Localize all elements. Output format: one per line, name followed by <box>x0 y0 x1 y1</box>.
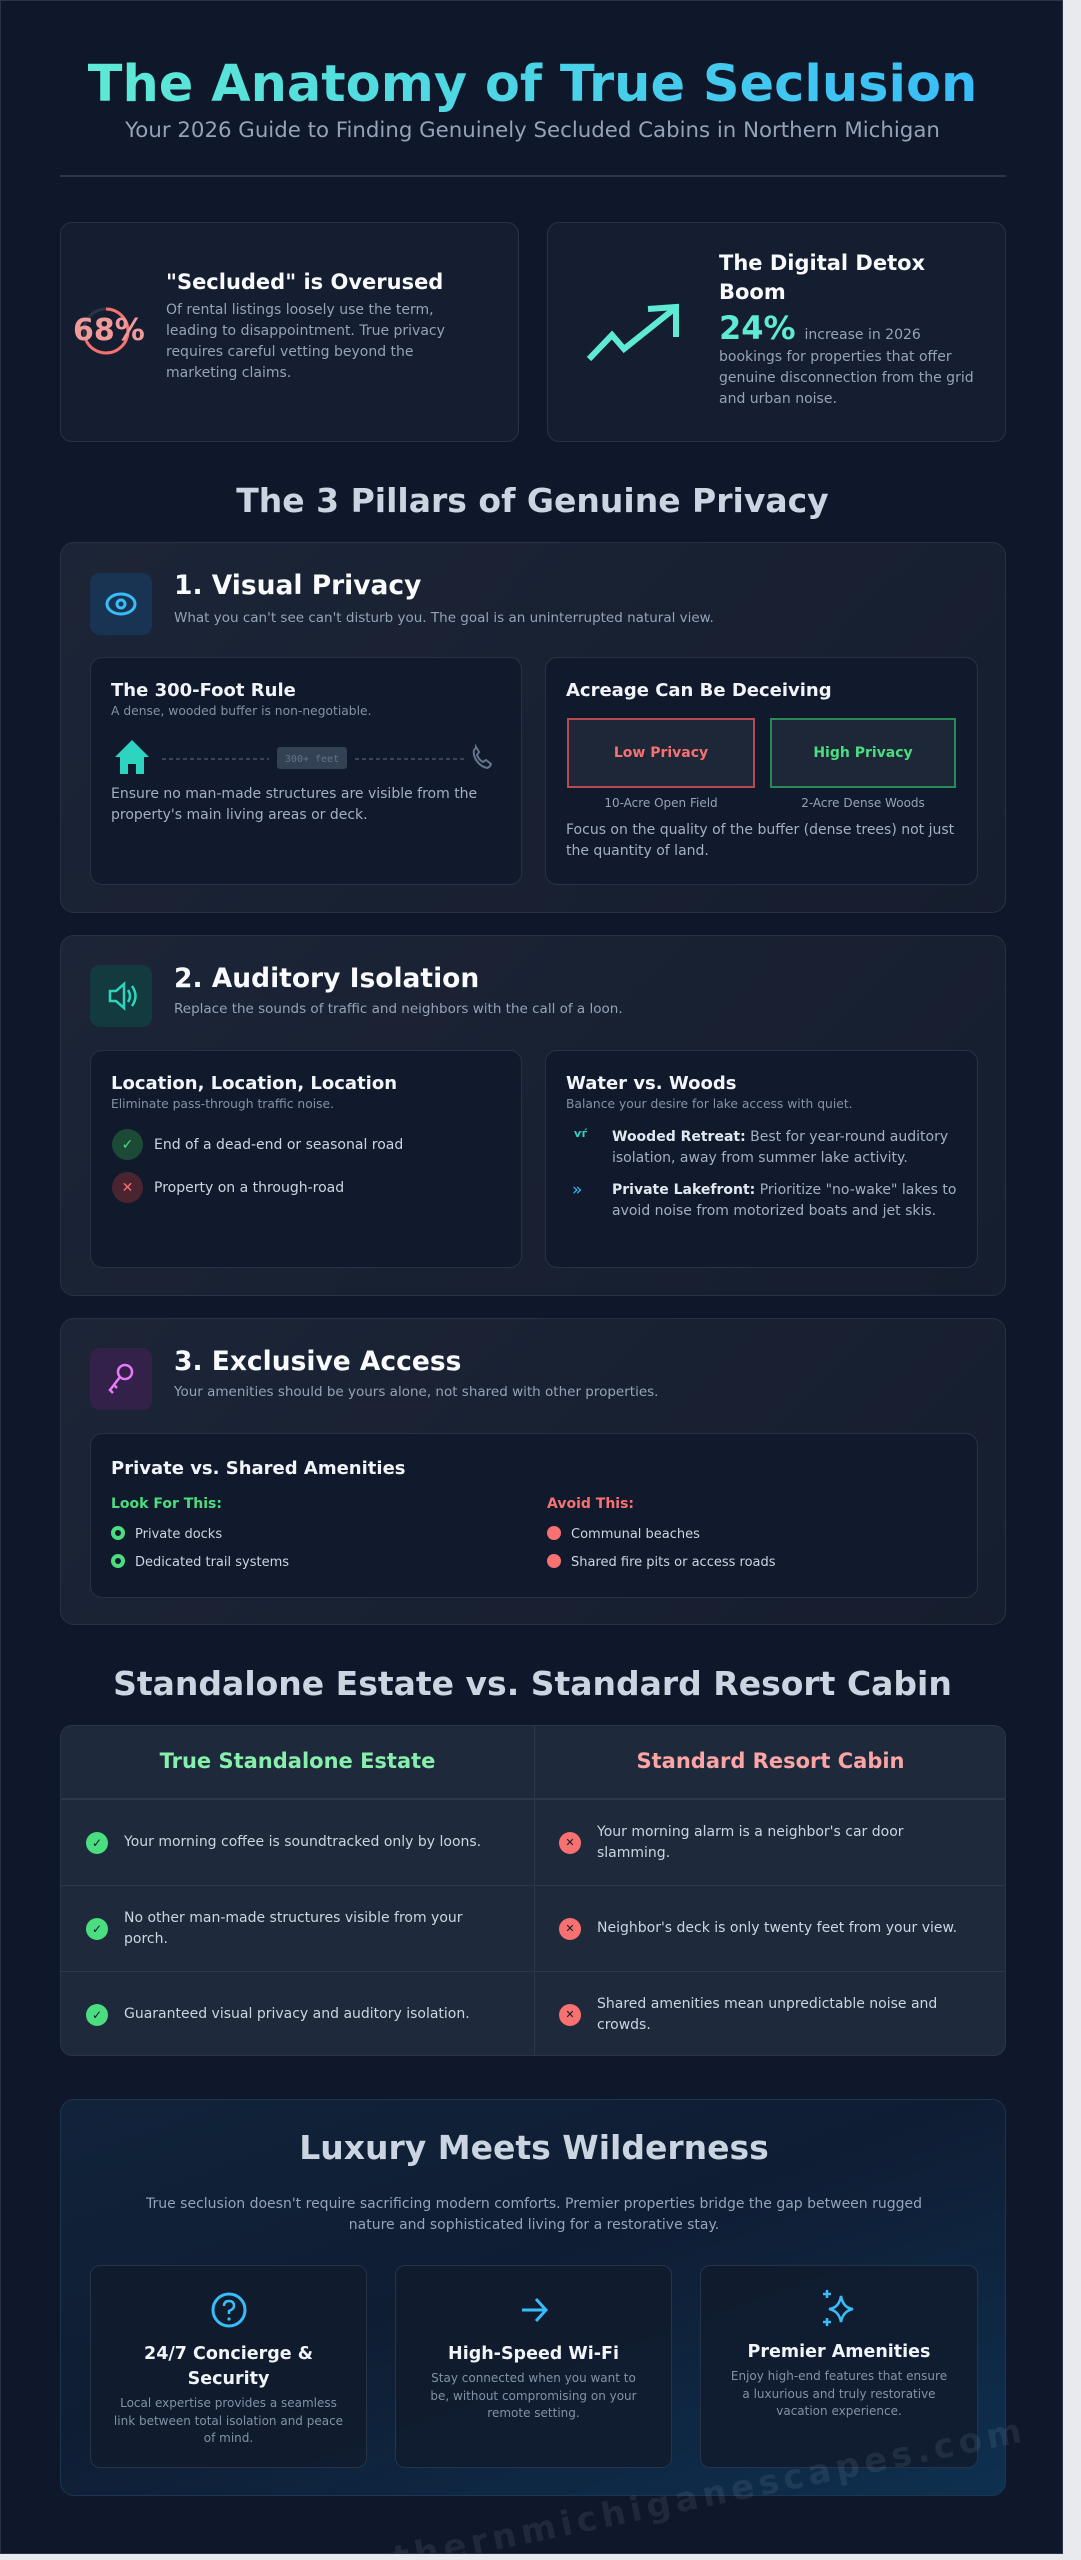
card: water vs woods: Water vs. Woods <box>566 1073 736 1094</box>
comparison table: ✕ <box>565 1836 575 1849</box>
item: bad <box>112 1172 344 1203</box>
icon: key <box>90 1348 152 1410</box>
comparison table: ✕ <box>565 1922 575 1935</box>
item: good: End of a dead-end or seasonal road <box>154 1136 403 1152</box>
header: resort: Standard Resort Cabin <box>636 1749 904 1773</box>
column: avoid this: Communal beaches <box>571 1527 700 1542</box>
box: high privacy <box>770 718 956 788</box>
card: concierge: 24/7 Concierge & Security <box>144 2344 313 2389</box>
card: 300-foot rule <box>90 657 522 885</box>
comparison table: ✓ <box>92 2008 102 2022</box>
diagram: house to neighbor distance <box>115 740 492 774</box>
title: The Anatomy of True Seclusion <box>88 55 977 114</box>
card: acreage: 10-Acre Open Field <box>604 796 718 810</box>
box: low privacy <box>567 718 755 788</box>
card: amenities <box>700 2265 978 2468</box>
comparison table: Neighbor's deck is only twenty feet from your view. <box>597 1920 957 1936</box>
icon: 68% ring: 68% <box>73 313 145 348</box>
rows: Your morning coffee is soundtracked only by loons. <box>124 1834 481 1850</box>
description: Your amenities should be yours alone, not shared with other properties. <box>174 1384 658 1400</box>
card: concierge: Local expertise provides a seamless link between total isolation and peace of mind. <box>114 2396 343 2445</box>
header: standalone: True Standalone Estate <box>160 1749 435 1773</box>
card: amenities: Premier Amenities <box>748 2342 930 2362</box>
item: good <box>112 1129 403 1160</box>
text: secluded: "Secluded" is Overused <box>166 270 443 294</box>
panel: luxury meets wilderness <box>60 2099 1006 2496</box>
card: 300-foot rule: The 300-Foot Rule <box>111 680 296 701</box>
text: detox <box>719 251 974 407</box>
description: True seclusion doesn't require sacrificing modern comforts. Premier properties bridge the gap between rugged nature and sophisticated living for a restorative stay. <box>146 2196 922 2233</box>
card: private vs shared <box>90 1433 978 1598</box>
description: Replace the sounds of traffic and neighbors with the call of a loon. <box>174 1001 623 1017</box>
box: low privacy: Low Privacy <box>614 745 708 761</box>
column: avoid this: Shared fire pits or access roads <box>571 1555 776 1570</box>
text: detox: The Digital Detox Boom <box>719 251 925 304</box>
comparison table: Shared amenities mean unpredictable noise and crowds. <box>597 1996 937 2032</box>
icon: trend arrow <box>586 304 679 362</box>
heading: 3. Exclusive Access <box>174 1346 461 1377</box>
comparison table: Guaranteed visual privacy and auditory isolation. <box>124 2006 470 2022</box>
card: acreage <box>545 657 978 885</box>
text: detox: 24% increase in 2026 bookings for properties that offer genuine disconnection from the grid and urban noise. <box>719 309 974 407</box>
box: high privacy: High Privacy <box>813 745 913 761</box>
card: acreage: 2-Acre Dense Woods <box>801 796 925 810</box>
item: private lakefront: Private Lakefront: Prioritize "no-wake" lakes to avoid noise from motorized boats and jet skis. <box>612 1182 956 1219</box>
text: Focus on the quality of the buffer (dense trees) not just the quantity of land. <box>566 822 954 859</box>
rows: ✓ <box>92 1836 102 1850</box>
card: wifi: High-Speed Wi-Fi <box>448 2344 619 2364</box>
icon: sound <box>90 965 152 1027</box>
heading: comparison: Standalone Estate vs. Standard Resort Cabin <box>113 1664 952 1703</box>
text: Ensure no man-made structures are visible from the property's main living areas or deck. <box>111 786 477 823</box>
card: water vs woods: Balance your desire for lake access with quiet. <box>566 1097 853 1111</box>
subtitle: Your 2026 Guide to Finding Genuinely Secluded Cabins in Northern Michigan <box>125 118 940 143</box>
column: avoid this <box>547 1496 776 1570</box>
comparison table: ✓ <box>92 1922 102 1936</box>
heading: 2. Auditory Isolation <box>174 963 479 994</box>
comparison table <box>60 1725 1006 2056</box>
stat card: digital detox <box>547 222 1006 442</box>
column: avoid this: Avoid This: <box>547 1496 634 1512</box>
panel: exclusive access <box>60 1318 1006 1625</box>
card: amenities: Enjoy high-end features that ensure a luxurious and truly restorative vacation experience. <box>731 2369 947 2418</box>
column: look for this: Dedicated trail systems <box>135 1555 289 1570</box>
item: good: ✓ <box>122 1136 133 1152</box>
card: acreage: Acreage Can Be Deceiving <box>566 680 832 701</box>
card: wifi <box>395 2265 672 2468</box>
card: location: Eliminate pass-through traffic noise. <box>111 1097 334 1111</box>
icon: eye <box>90 573 152 635</box>
item: wooded retreat: ѵѓ <box>574 1127 587 1140</box>
description: What you can't see can't disturb you. The goal is an uninterrupted natural view. <box>174 610 714 626</box>
panel: auditory isolation <box>60 935 1006 1296</box>
stat card: secluded overused <box>60 222 519 442</box>
card: 300-foot rule: A dense, wooded buffer is non-negotiable. <box>111 704 372 718</box>
heading: visual privacy: 1. Visual Privacy <box>174 570 421 601</box>
item: private lakefront: » <box>572 1180 582 1200</box>
item: bad: Property on a through-road <box>154 1180 344 1196</box>
comparison table: Your morning alarm is a neighbor's car door slamming. <box>597 1824 904 1860</box>
card: location <box>90 1050 522 1268</box>
heading: Luxury Meets Wilderness <box>299 2128 769 2167</box>
comparison table: No other man-made structures visible from your porch. <box>124 1910 463 1946</box>
column: look for this <box>111 1496 289 1570</box>
heading: pillars: The 3 Pillars of Genuine Privacy <box>236 481 829 520</box>
diagram: house to neighbor distance: 300+ feet <box>285 754 339 765</box>
item: bad: ✕ <box>122 1180 133 1196</box>
card: concierge <box>90 2265 367 2468</box>
item: wooded retreat: Wooded Retreat: Best for year-round auditory isolation, away from summer lake activity. <box>612 1129 948 1166</box>
card: water vs woods <box>545 1050 978 1268</box>
card: wifi: Stay connected when you want to be, without compromising on your remote setting. <box>430 2371 637 2420</box>
rows <box>86 1832 481 1854</box>
card: private vs shared: Private vs. Shared Amenities <box>111 1458 406 1479</box>
panel: visual privacy <box>60 542 1006 913</box>
card: location: Location, Location, Location <box>111 1073 397 1094</box>
column: look for this: Look For This: <box>111 1496 222 1512</box>
column: look for this: Private docks <box>135 1527 222 1542</box>
text: secluded: Of rental listings loosely use the term, leading to disappointment. True privacy requires careful vetting beyond the marketing claims. <box>166 302 445 381</box>
comparison table: ✕ <box>565 2008 575 2021</box>
